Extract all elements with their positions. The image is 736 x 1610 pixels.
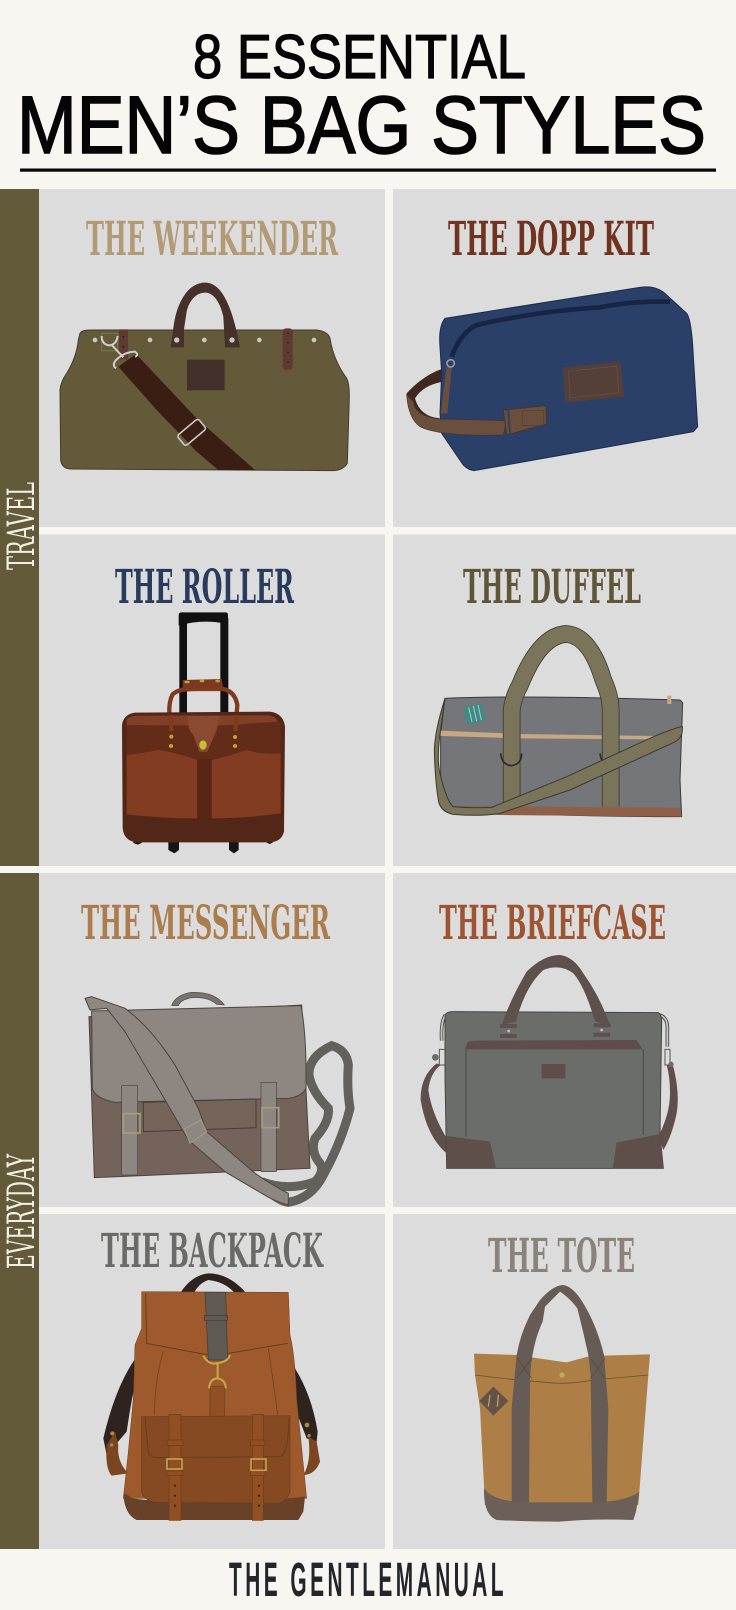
panel: the roller: [39, 534, 385, 866]
title: [17, 23, 706, 171]
panel: the duffel: [393, 534, 736, 866]
sidebar: travel: [0, 189, 43, 866]
panel: the messenger: [39, 873, 385, 1207]
panel: the tote: [393, 1214, 736, 1549]
panel: the messenger: THE MESSENGER: [81, 896, 330, 951]
panel: the backpack: [39, 1214, 385, 1549]
icon: messenger bag: [85, 992, 350, 1205]
icon: roller bag: [122, 612, 285, 853]
sidebar: everyday: EVERYDAY: [0, 1154, 43, 1269]
panel: the backpack: THE BACKPACK: [101, 1224, 324, 1279]
icon: tote bag: [474, 1285, 650, 1522]
icon: weekender bag: [60, 283, 349, 471]
icon: briefcase bag: [421, 955, 678, 1168]
icon: backpack: [103, 1273, 320, 1520]
sidebar: travel: TRAVEL: [0, 482, 43, 570]
panel: the weekender: THE WEEKENDER: [86, 212, 338, 267]
panel: the dopp kit: [393, 189, 736, 527]
icon: duffel bag: [434, 634, 683, 817]
panel: the weekender: [39, 189, 385, 527]
sidebar: everyday: [0, 873, 43, 1549]
panel: the roller: THE ROLLER: [115, 560, 294, 615]
title: 8 ESSENTIAL: [193, 23, 526, 92]
icon: dopp kit bag: [407, 287, 698, 471]
panel: the briefcase: [393, 873, 736, 1207]
